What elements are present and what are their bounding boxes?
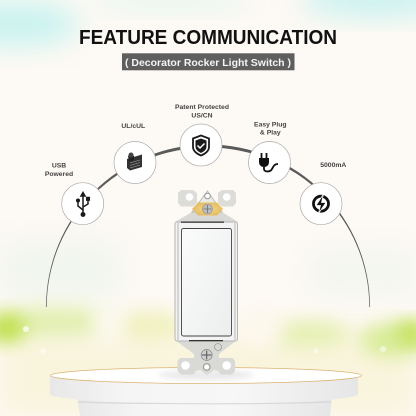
feature: Patent Protected US/CN [175, 104, 229, 166]
subtitle badge: ( Decorator Rocker Light Switch ) [125, 57, 291, 69]
top mounting strap [175, 190, 238, 222]
bottom mounting strap [175, 340, 237, 375]
feature: Easy Plug & Play: & Play [260, 130, 281, 137]
feature: Easy Plug & Play [248, 121, 290, 184]
icon: certificate [127, 152, 142, 170]
feature: 5000mA: 5000mA [320, 162, 346, 169]
feature: UL/cUL [114, 123, 156, 184]
podium [50, 368, 362, 416]
icon: lightning bolt in ring [314, 194, 328, 214]
feature: USB Powered [45, 162, 104, 225]
feature: UL/cUL: UL/cUL [121, 123, 145, 130]
title: FEATURE COMMUNICATION [79, 27, 337, 49]
feature: USB Powered: Powered [45, 171, 73, 178]
feature: USB Powered: USB [52, 162, 66, 170]
rocker paddle [182, 228, 232, 336]
feature: Patent Protected US/CN: US/CN [191, 112, 213, 120]
feature: Patent Protected US/CN: Patent Protected [175, 104, 229, 111]
icon: USB symbol [77, 192, 89, 216]
subtitle badge [122, 53, 294, 70]
feature: 5000mA [300, 162, 346, 225]
feature: Easy Plug & Play: Easy Plug [254, 121, 287, 128]
icon: shield check [193, 136, 209, 156]
switch frame [175, 222, 238, 341]
product: decorator rocker switch [175, 190, 238, 375]
decorative arc linking the feature icons [46, 144, 370, 307]
icon: power plug [259, 153, 278, 171]
